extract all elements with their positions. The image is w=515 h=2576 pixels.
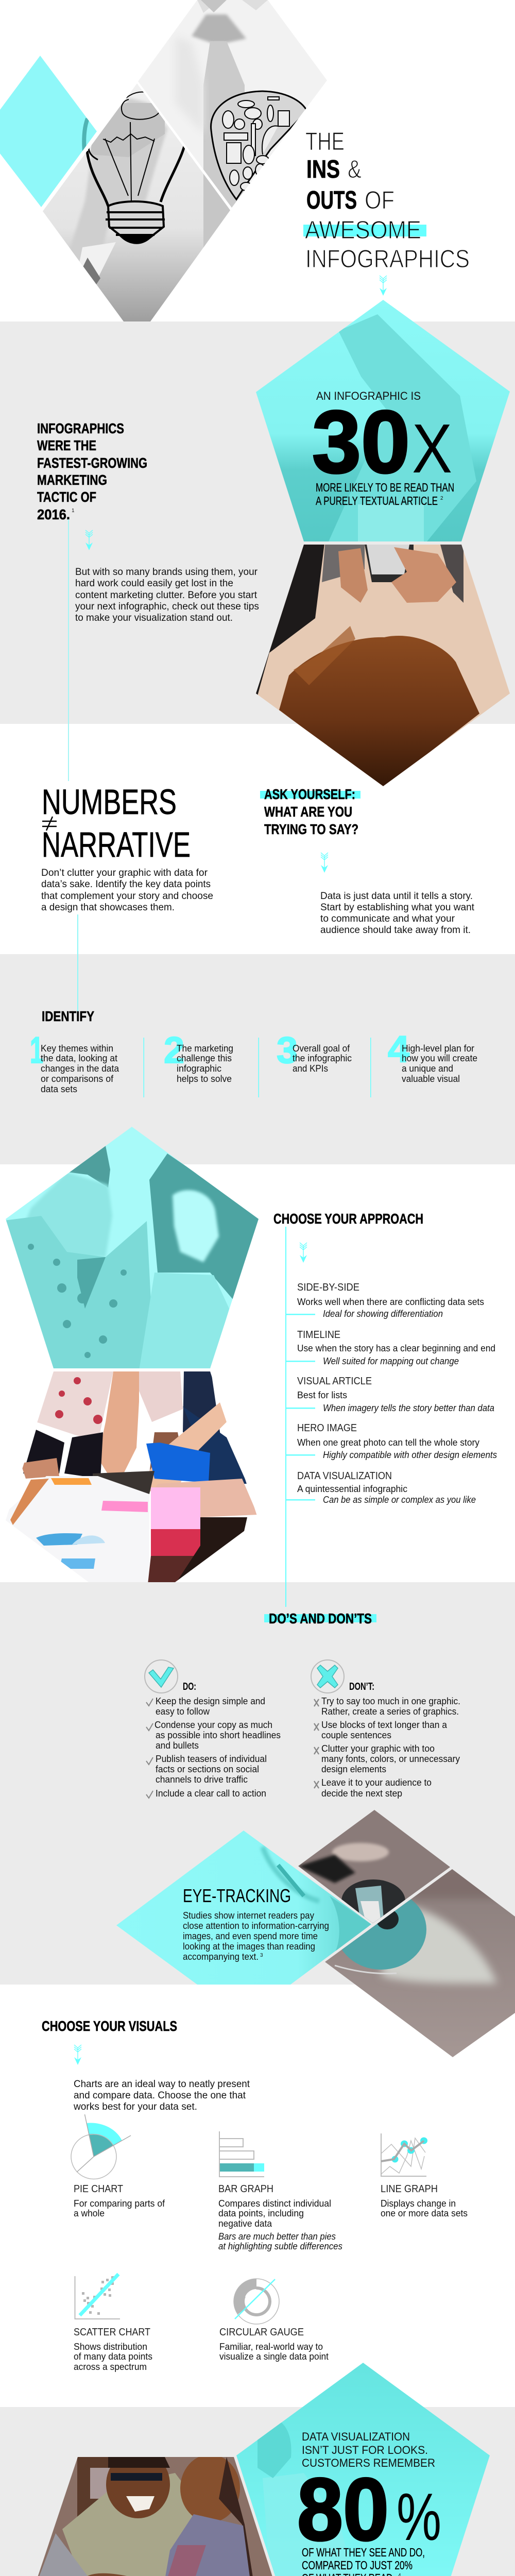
title: THE: [305, 128, 345, 156]
heading: ask yourself: ASK YOURSELF:: [264, 786, 355, 802]
identify item 3: and KPIs: [293, 1063, 328, 1074]
approach: side-by-side: Ideal for showing differentiation: [323, 1309, 443, 1319]
panel: do list: Include a clear call to action: [156, 1788, 266, 1799]
heading: identify: IDENTIFY: [42, 1008, 94, 1024]
text: don't clutter: Don’t clutter your graphic with data for: [41, 868, 208, 878]
identify item 1: 1: [30, 1030, 43, 1071]
text: data visualization isn't just for looks: [302, 2430, 435, 2469]
heading: numbers not equal narrative: NUMBERS: [42, 782, 177, 822]
identify item 4: [388, 1029, 477, 1084]
arrow: [380, 276, 387, 296]
identify item 2: [164, 1030, 233, 1084]
photo: couple at laptop: [38, 2457, 272, 2576]
text: studies show: Studies show internet readers pay: [183, 1910, 314, 1921]
text: studies show: 3: [260, 1953, 263, 1958]
heading: choose your approach: CHOOSE YOUR APPROACH: [273, 1211, 423, 1227]
text: of what they see and do: [302, 2546, 425, 2576]
chart: pie chart: PIE CHART: [74, 2183, 123, 2195]
text: data visualization isn't just for looks: CUSTOMERS REMEMBER: [302, 2456, 435, 2469]
text: but with so many brands: content marketing clutter. Before you start: [75, 590, 258, 601]
approach: hero image: When one great photo can tell the whole story: [297, 1437, 479, 1448]
text: studies show: [183, 1910, 329, 1962]
photo: man with tie and doodle bulb: [41, 0, 330, 325]
arrow: [85, 530, 93, 550]
text: of what they see and do: COMPARED TO JUST 20%: [302, 2558, 413, 2572]
text: more likely: [316, 481, 454, 507]
text: studies show: looking at the images than reading: [183, 1941, 315, 1952]
panel: don't list: Leave it to your audience to: [321, 1777, 432, 1788]
text: charts are an ideal way: Charts are an ideal way to neatly present: [74, 2079, 250, 2090]
identify item 3: 3: [277, 1030, 298, 1071]
chart: bar graph: Bars are much better than pies: [218, 2231, 336, 2242]
panel: do list: Publish teasers of individual: [156, 1754, 267, 1764]
chart: line graph: LINE GRAPH: [381, 2183, 438, 2195]
approach: visual article: When imagery tells the story better than data: [323, 1403, 494, 1413]
panel: don't list: DON’T:: [349, 1681, 374, 1692]
stat: 30x: X: [412, 410, 452, 487]
text: don't clutter: that complement your story and choose: [41, 891, 213, 902]
photo: eye lower diamond: [322, 1868, 515, 2058]
arrow: [321, 853, 328, 873]
identify item 1: changes in the data: [41, 1063, 119, 1074]
chart: bar graph: BAR GRAPH: [218, 2183, 273, 2195]
heading: ask yourself: TRYING TO SAY?: [264, 821, 358, 837]
arrow: [300, 1243, 307, 1263]
text: charts are an ideal way: [73, 2079, 250, 2112]
heading: ask yourself: WHAT ARE YOU: [264, 804, 352, 820]
text: infographics were the fastest-growing: 2016.: [37, 506, 70, 522]
text: but with so many brands: to make your visualization stand out.: [75, 613, 233, 623]
stat: 80 percent: %: [397, 2479, 441, 2554]
chart: circular gauge: visualize a single data point: [219, 2351, 329, 2362]
identify item 3: the infographic: [293, 1053, 352, 1063]
title: AWESOME: [305, 216, 421, 244]
chart: bar graph: Compares distinct individual: [218, 2198, 331, 2209]
chart: circular gauge: [219, 2279, 329, 2362]
chart: circular gauge: CIRCULAR GAUGE: [219, 2327, 304, 2338]
identify item 1: the data, looking at: [41, 1053, 117, 1063]
text: don't clutter: data’s sake. Identify the key data points: [41, 879, 211, 890]
approach: timeline: [286, 1329, 495, 1366]
approach: timeline: Well suited for mapping out change: [323, 1356, 459, 1366]
arrow: [74, 2045, 81, 2065]
panel: do list: [145, 1660, 281, 1799]
text: data is just data: Data is just data until it tells a story.: [320, 891, 473, 902]
identify item 1: data sets: [41, 1084, 77, 1094]
chart: pie chart: [71, 2114, 165, 2218]
identify item 4: a unique and: [402, 1063, 453, 1074]
title: OF: [365, 187, 394, 214]
chart: line graph: Displays change in: [381, 2198, 456, 2209]
text: infographics were the fastest-growing: 1: [72, 508, 75, 514]
text: but with so many brands: hard work could easily get lost in the: [75, 578, 233, 589]
text: don't clutter: [41, 868, 213, 913]
text: data visualization isn't just for looks: ISN’T JUST FOR LOOKS.: [302, 2444, 428, 2456]
text: data is just data: audience should take away from it.: [320, 925, 471, 936]
chart: pie chart: a whole: [74, 2208, 105, 2218]
text: data is just data: [320, 891, 475, 936]
text: of what they see and do: OF WHAT THEY SEE AND DO,: [302, 2546, 425, 2559]
title: &: [348, 156, 362, 183]
identify item 1: or comparisons of: [41, 1074, 114, 1084]
text: charts are an ideal way: works best for your data set.: [73, 2102, 197, 2112]
panel: do list: Condense your copy as much: [154, 1720, 272, 1730]
icon: check in circle: [145, 1660, 178, 1693]
chart: bar graph: negative data: [218, 2218, 272, 2229]
approach: visual article: VISUAL ARTICLE: [297, 1376, 372, 1387]
identify item 1: [30, 1030, 119, 1094]
chart: scatter chart: across a spectrum: [74, 2362, 147, 2372]
text: don't clutter: a design that showcases them.: [41, 902, 175, 913]
chart: scatter chart: of many data points: [74, 2351, 152, 2362]
panel: do list: as possible into short headlines: [156, 1730, 281, 1740]
panel: don't list: Use blocks of text longer than a: [321, 1720, 448, 1730]
panel: do list: Keep the design simple and: [156, 1696, 265, 1706]
panel: 80 percent pentagon: [234, 2360, 492, 2576]
panel: don't list: Rather, create a series of graphics.: [321, 1706, 459, 1717]
identify item 2: helps to solve: [177, 1074, 232, 1084]
text: infographics were the fastest-growing: WERE THE: [37, 437, 96, 453]
chart: bar graph: data points, including: [218, 2208, 304, 2218]
icon: x in circle: [311, 1660, 344, 1693]
chart: scatter chart: Shows distribution: [74, 2342, 147, 2352]
photo: eye upper diamond: [294, 1808, 453, 1927]
chart: line graph: one or more data sets: [381, 2208, 468, 2218]
stat: 30x: 30: [312, 393, 410, 492]
panel: do list: facts or sections on social: [156, 1764, 259, 1774]
identify item 2: challenge this: [177, 1053, 232, 1063]
panel: do list: channels to drive traffic: [156, 1774, 248, 1785]
panel: eye-tracking cyan diamond: [113, 1826, 376, 1986]
approach: visual article: Best for lists: [297, 1390, 347, 1400]
panel: don't list: Try to say too much in one graphic.: [321, 1696, 460, 1706]
text: more likely: A PURELY TEXTUAL ARTICLE: [316, 494, 438, 507]
identify item 3: Overall goal of: [293, 1043, 350, 1054]
approach: data visualization: A quintessential infographic: [297, 1484, 407, 1494]
identify item 2: 2: [164, 1030, 184, 1071]
chart: scatter chart: [74, 2274, 152, 2372]
panel: do list: easy to follow: [156, 1706, 210, 1717]
heading: choose your visuals: CHOOSE YOUR VISUALS: [42, 2018, 177, 2034]
photo: cyan diamond: [0, 56, 97, 207]
identify item 4: High-level plan for: [402, 1043, 474, 1054]
chart: pie chart: For comparing parts of: [74, 2198, 165, 2209]
panel: don't list: many fonts, colors, or unnecessary: [321, 1754, 460, 1764]
identify item 2: The marketing: [177, 1043, 233, 1054]
identify item 1: Key themes within: [41, 1043, 113, 1054]
identify item 4: 4: [388, 1029, 409, 1070]
approach: timeline: TIMELINE: [297, 1329, 340, 1341]
identify item 4: valuable visual: [402, 1074, 460, 1084]
text: data visualization isn't just for looks: DATA VISUALIZATION: [302, 2430, 410, 2443]
text: but with so many brands: But with so many brands using them, your: [75, 567, 258, 578]
identify item 3: [277, 1030, 352, 1074]
text: more likely: 2: [440, 496, 443, 501]
text: infographics were the fastest-growing: TACTIC OF: [37, 489, 96, 505]
heading: ask yourself: [260, 786, 360, 837]
stat: 80 percent: 80: [297, 2460, 389, 2559]
approach: side-by-side: [286, 1282, 484, 1319]
chart: bar graph: [218, 2131, 342, 2251]
title: INS: [306, 156, 340, 183]
approach: visual article: [286, 1376, 494, 1413]
text: infographics were the fastest-growing: MARKETING: [37, 472, 107, 488]
text: infographics were the fastest-growing: FASTEST-GROWING: [37, 455, 147, 471]
chart: line graph: [381, 2133, 468, 2218]
heading: do's and don'ts: DO’S AND DON’TS: [269, 1611, 372, 1626]
heading: numbers not equal narrative: NARRATIVE: [42, 825, 191, 865]
text: infographics were the fastest-growing: INFOGRAPHICS: [37, 420, 124, 436]
text: studies show: images, and even spend more time: [183, 1931, 318, 1941]
approach: data visualization: [286, 1470, 476, 1505]
approach: side-by-side: Works well when there are conflicting data sets: [297, 1297, 484, 1307]
text: studies show: close attention to information-carrying: [183, 1921, 329, 1931]
text: studies show: accompanying text.: [183, 1952, 259, 1962]
panel: don't list: decide the next step: [321, 1788, 402, 1799]
text: an infographic is: AN INFOGRAPHIC IS: [316, 389, 421, 402]
panel: don't list: [311, 1660, 460, 1799]
photo: teal couple pentagon: [0, 1123, 263, 1370]
panel: 30x pentagon: [252, 299, 515, 544]
text: data is just data: to communicate and what your: [320, 913, 455, 924]
chart: bar graph: at highlighting subtle differences: [218, 2241, 342, 2251]
approach: side-by-side: SIDE-BY-SIDE: [297, 1282, 359, 1293]
text: data is just data: Start by establishing what you want: [320, 902, 475, 913]
photo: woman reading tablet from above: [247, 544, 515, 788]
approach: hero image: HERO IMAGE: [297, 1422, 357, 1434]
panel: don't list: Clutter your graphic with too: [321, 1743, 435, 1754]
approach: hero image: Highly compatible with other design elements: [323, 1450, 497, 1460]
approach: hero image: [286, 1422, 497, 1460]
text: but with so many brands: [75, 567, 259, 623]
title: INFOGRAPHICS: [305, 245, 470, 273]
text: more likely: MORE LIKELY TO BE READ THAN: [316, 481, 454, 494]
approach: data visualization: DATA VISUALIZATION: [297, 1470, 392, 1482]
title: OUTS: [306, 187, 357, 214]
text: but with so many brands: your next infographic, check out these tips: [75, 601, 259, 612]
identify item 2: infographic: [177, 1063, 221, 1074]
panel: do list: DO:: [183, 1681, 196, 1692]
title: [303, 128, 470, 273]
identify item 4: how you will create: [402, 1053, 477, 1063]
photo: team over color charts: [0, 1370, 263, 1587]
approach: timeline: Use when the story has a clear beginning and end: [297, 1343, 495, 1353]
chart: circular gauge: Familiar, real-world way to: [219, 2342, 323, 2352]
chart: scatter chart: SCATTER CHART: [74, 2327, 150, 2338]
text: infographics were the fastest-growing: [37, 420, 147, 522]
stat: 80 percent: [297, 2460, 441, 2559]
heading: numbers not equal narrative: [42, 782, 191, 865]
panel: don't list: design elements: [321, 1764, 386, 1774]
panel: don't list: couple sentences: [321, 1730, 391, 1740]
heading: eye-tracking: EYE-TRACKING: [183, 1885, 291, 1906]
text: charts are an ideal way: and compare data. Choose the one that: [74, 2090, 246, 2101]
panel: do list: and bullets: [156, 1740, 199, 1751]
approach: data visualization: Can be as simple or complex as you like: [323, 1495, 476, 1505]
